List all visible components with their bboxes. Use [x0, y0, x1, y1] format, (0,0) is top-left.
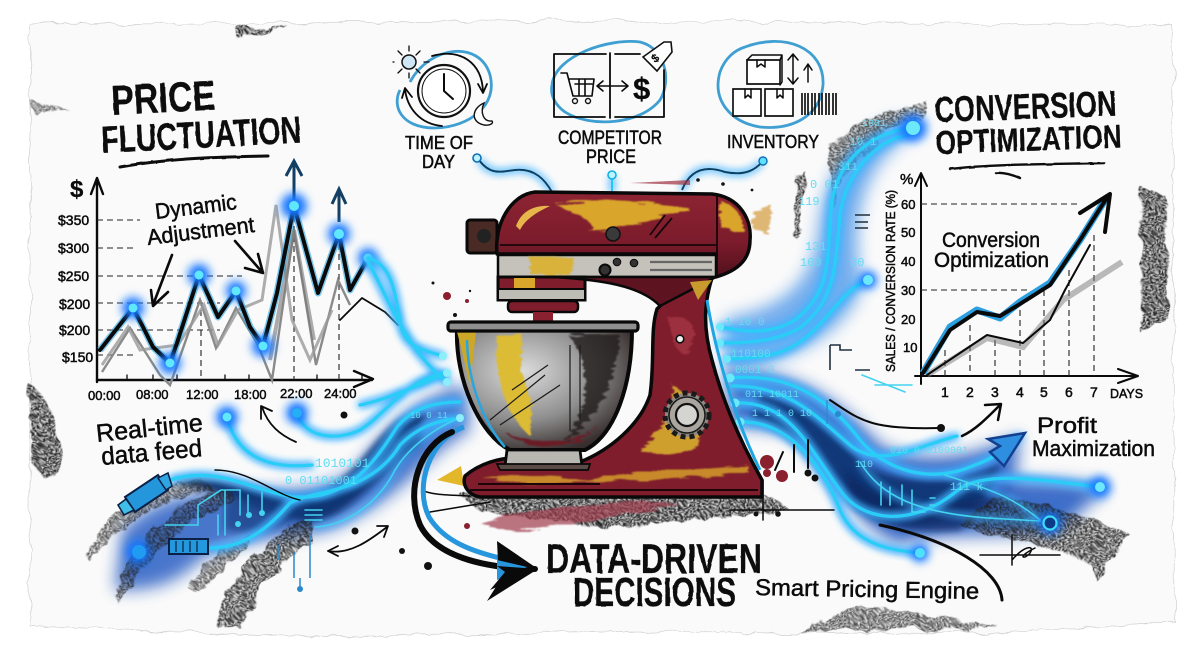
mixer head — [467, 192, 750, 322]
heading: conversion optimization: OPTIMIZATION — [935, 118, 1122, 161]
icon: usb connector lower — [169, 539, 208, 554]
stand mixer illustration — [422, 178, 834, 530]
conversion line chart: 4 — [1016, 384, 1024, 400]
conversion line chart: % — [900, 171, 913, 188]
node: cable end — [126, 540, 150, 564]
data wires right — [716, 114, 1111, 600]
icon: usb connector upper — [118, 473, 172, 515]
arrow: to data-driven decisions — [414, 427, 538, 601]
heading: data-driven decisions: DATA-DRIVEN — [546, 535, 762, 582]
binary data stream right — [725, 119, 983, 512]
price line chart: $300 — [58, 240, 89, 256]
label: profit maximization — [1032, 413, 1155, 461]
icon: gear knob — [665, 393, 709, 437]
conversion line chart: 1 — [941, 384, 949, 400]
callout: conversion optimization: Optimization — [934, 249, 1049, 272]
heading: conversion optimization: CONVERSION — [934, 83, 1117, 130]
price line chart: $200 — [59, 322, 90, 338]
icon: inventory: INVENTORY — [727, 132, 819, 152]
heading: conversion optimization — [934, 83, 1122, 178]
callout: dynamic adjustment: Adjustment — [146, 212, 256, 250]
conversion line chart: 7 — [1090, 384, 1098, 400]
heading: price fluctuation: FLUCTUATION — [100, 110, 302, 162]
wire end nodes — [716, 114, 1111, 562]
conversion line chart: 50 — [901, 225, 915, 240]
binary data stream right: 010 0 0100001 — [890, 446, 968, 457]
icon: competitor price: PRICE — [586, 147, 636, 168]
icon: inventory — [718, 41, 836, 152]
mixer pedestal and base — [464, 278, 762, 497]
factor icons — [393, 41, 836, 192]
icon: competitor price — [552, 41, 672, 168]
binary data stream right: 1 10 0 — [725, 317, 765, 329]
binary data stream right: 111 k — [950, 482, 983, 494]
binary data stream right: 110100 — [731, 349, 771, 361]
binary data stream left: 1010101 — [315, 456, 370, 471]
binary data stream right: 10 1 — [850, 137, 877, 149]
callout: real-time data feed: Real-time — [95, 409, 204, 448]
callout: conversion optimization — [934, 229, 1049, 272]
price line chart: $250 — [58, 268, 89, 284]
icon: time of day: TIME OF — [405, 133, 473, 153]
arrow: profit maximization — [988, 433, 1025, 466]
arrow: profit upper dark — [830, 400, 1001, 436]
heading: price fluctuation: PRICE — [110, 72, 216, 124]
price line chart: 18:00 — [234, 387, 267, 402]
callout: dynamic adjustment: Dynamic — [154, 189, 238, 224]
binary data stream right: 0001 0 — [735, 365, 775, 377]
price line chart: $150 — [62, 349, 93, 365]
price line chart: $350 — [58, 212, 89, 228]
conversion line chart — [884, 171, 1143, 401]
price line chart: 00:00 — [88, 388, 121, 403]
dark circuit backdrop — [85, 100, 1130, 628]
callout: dynamic adjustment — [146, 189, 263, 306]
conversion line chart: 10 — [903, 340, 917, 355]
conversion line chart: DAYS — [1110, 386, 1143, 401]
price line chart: 24:00 — [324, 386, 357, 401]
heading: price fluctuation — [100, 72, 302, 167]
conversion line chart: SALES / CONVERSION RATE (%) — [884, 190, 898, 372]
callout: real-time data feed: data feed — [100, 434, 203, 471]
icon: competitor price: $ — [649, 52, 662, 65]
nodes on left wires — [216, 352, 464, 428]
binary data stream right: 0 01 — [810, 178, 839, 192]
panel: price fluctuation — [58, 72, 398, 403]
price line chart — [58, 161, 398, 403]
paint splatter behind mixer — [422, 178, 834, 530]
small ink arrows left — [261, 406, 432, 570]
conversion line chart: 2 — [966, 384, 974, 400]
heading: data-driven decisions — [546, 535, 762, 615]
binary data stream right: 119 — [798, 195, 820, 209]
binary data stream right: 1001 — [862, 119, 886, 130]
binary data stream left: 0 01101001 — [285, 474, 357, 488]
conversion line chart: 30 — [901, 283, 915, 298]
binary data stream right: 131 — [805, 240, 827, 254]
binary data stream left — [165, 411, 448, 592]
mixer bowl — [448, 322, 638, 470]
binary data stream right: 011 10011 — [745, 390, 799, 401]
callout: real-time data feed — [95, 409, 204, 471]
data wires left — [95, 258, 464, 592]
price line chart: $200 — [59, 296, 90, 312]
binary data stream right: 110 — [855, 460, 873, 471]
binary data stream left: 10 0 11 — [410, 411, 448, 421]
conversion line chart: 6 — [1065, 384, 1073, 400]
chart nodes — [122, 193, 378, 374]
icon: time of day — [393, 46, 493, 172]
conversion line chart: 40 — [901, 254, 915, 269]
price line chart: 08:00 — [136, 387, 169, 402]
conversion line chart: 5 — [1040, 384, 1048, 400]
binary data stream right: 311 — [838, 162, 858, 174]
icon: competitor price: $ — [633, 71, 650, 106]
icon: time of day: DAY — [422, 152, 455, 172]
icon: competitor price: COMPETITOR — [558, 128, 662, 149]
label: profit maximization: Profit — [1037, 413, 1097, 438]
price line chart: $ — [70, 176, 84, 203]
binary data stream right: 100 — [800, 256, 822, 270]
label: smart pricing engine: Smart Pricing Engine — [755, 574, 979, 604]
callout: conversion optimization: Conversion — [942, 229, 1040, 252]
price line chart: 22:00 — [280, 386, 313, 401]
conversion line chart: 3 — [991, 384, 999, 400]
price line chart: 12:00 — [186, 387, 219, 402]
binary data stream right: 00 — [850, 256, 864, 270]
label: profit maximization: Maximization — [1032, 436, 1155, 461]
binary data stream right: 1 1 1 0 10 — [752, 409, 812, 420]
panel: conversion optimization — [884, 83, 1143, 401]
heading: data-driven decisions: DECISIONS — [573, 569, 736, 615]
ink scribble bottom right — [880, 525, 1060, 600]
conversion line chart: 60 — [901, 197, 915, 212]
conversion line chart: 20 — [901, 312, 915, 327]
factor connector wires — [473, 154, 767, 192]
